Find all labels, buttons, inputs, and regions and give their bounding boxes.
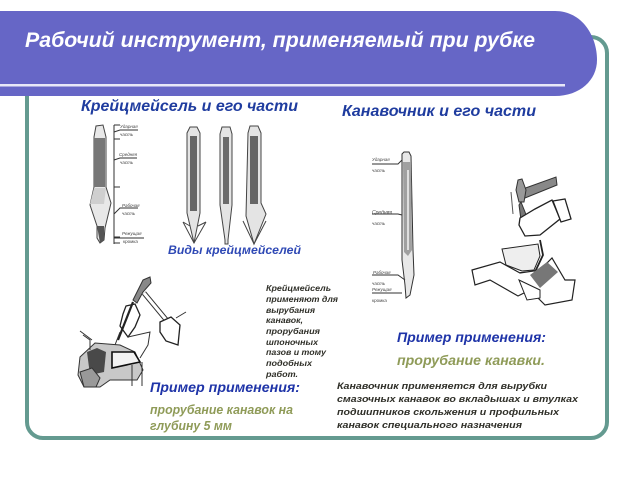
diagram: chisel with parts: Рабочая [122, 203, 140, 208]
text block: chisel use: работ. [265, 369, 298, 379]
text block: chisel use: вырубания [266, 305, 315, 315]
chisel type 3 [243, 126, 266, 244]
example heading: chisel: Пример применения: [150, 379, 300, 395]
title: Рабочий инструмент, применяемый при рубке [25, 28, 535, 52]
text block: groove chisel use: Канавочник применяется для вырубки [337, 381, 547, 392]
diagram: chisel types [183, 126, 266, 244]
diagram: groove chisel with parts: Ударная [372, 157, 390, 162]
diagram: groove chisel with parts: Средняя [372, 210, 392, 216]
text block: chisel use: канавок, [266, 315, 303, 325]
text block: groove chisel use: смазочных канавок во вкладышах и втулках [337, 394, 579, 405]
content frame [27, 37, 607, 438]
example text: chisel [150, 403, 293, 433]
text block: groove chisel use: канавок специального назначения [337, 420, 522, 431]
text block: chisel use: подобных [266, 358, 312, 368]
diagram: groove chisel with parts: часть [372, 221, 386, 226]
example heading: groove chisel: Пример применения: [397, 329, 546, 345]
example text: chisel: глубину 5 мм [150, 419, 232, 433]
diagram: chisel with parts: Режущая [122, 231, 142, 236]
diagram: groove chisel with parts: Рабочая [373, 270, 391, 275]
diagram: groove chisel with parts: часть [372, 168, 386, 173]
heading: groove chisel parts: Канавочник и его части [342, 103, 537, 120]
text block: chisel use: Крейцмейсель [266, 283, 331, 293]
caption: chisel types: Виды крейцмейселей [168, 243, 302, 257]
diagram: chisel with parts: кромка [123, 239, 138, 244]
text block: groove chisel use [337, 381, 579, 431]
diagram: groove chisel with parts: часть [372, 281, 386, 286]
illustration: chiselling a groove in a vise [78, 277, 186, 387]
text block: chisel use: шпоночных [266, 337, 318, 347]
illustration: cutting a groove in a bearing shell [472, 177, 575, 305]
text block: chisel use: пазов и тому [266, 347, 326, 357]
text block: groove chisel use: подшипников скольжения и профильных [337, 407, 560, 418]
diagram: chisel with parts: часть [120, 132, 134, 137]
text block: chisel use [265, 283, 338, 379]
text block: chisel use: применяют для [266, 294, 338, 304]
example text: groove chisel: прорубание канавки. [397, 353, 545, 368]
example text: chisel: прорубание канавок на [150, 403, 293, 417]
text block: chisel use: прорубания [266, 326, 320, 336]
heading: chisel parts: Крейцмейсель и его части [81, 98, 299, 115]
diagram: chisel with parts: Ударная [120, 124, 138, 129]
diagram: groove chisel with parts: Режущая [372, 287, 392, 292]
diagram: chisel with parts [90, 124, 144, 244]
diagram: groove chisel with parts: кромка [372, 298, 387, 303]
diagram: chisel with parts: Средняя [119, 152, 138, 157]
chisel type 1 [183, 127, 206, 243]
diagram: groove chisel with parts [372, 152, 414, 303]
header banner [0, 11, 597, 96]
diagram: chisel with parts: часть [122, 211, 136, 216]
diagram: chisel with parts: часть [120, 160, 134, 165]
chisel type 2 [220, 127, 232, 244]
